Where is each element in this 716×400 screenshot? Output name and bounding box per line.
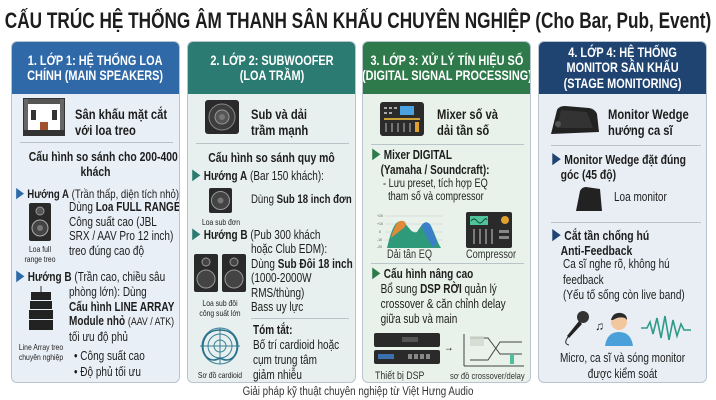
text: anti-feedback detail: (Yếu tố sống còn live band) [563,288,685,302]
text: wedge placement: góc (45 độ) [561,167,616,182]
text: advanced config [371,267,506,326]
footer: Giải pháp kỹ thuật chuyên nghiệp từ Việt Hưng Audio [243,386,473,398]
text: bullets: • Công suất cao [74,349,145,363]
text: sub caption: Sub và dải [251,106,307,122]
text: wedge placement: ▶ Monitor Wedge đặt đúng [551,152,686,167]
heading: layer 2 [188,42,355,94]
heading: layer 4: 4. LỚP 4: HỆ THỐNG [568,44,677,60]
chart: crossover diagram [464,334,524,366]
text: option B detail: Bass uy lực [251,300,303,314]
icon: microphone [565,311,589,346]
panel: layer 1 main speakers [11,41,180,383]
text: mixer detail: - Lưu preset, tích hợp EQ [383,178,488,190]
icon: digital mixer [380,102,424,136]
panel: layer 4 monitoring [538,41,707,383]
label: loa monitor: Loa monitor [614,190,667,204]
text: summary: Tóm tắt: [253,323,292,337]
text: wedge caption [608,106,689,138]
label: line array [19,342,63,362]
text: compare heading [29,149,178,178]
icon: singer [595,312,633,346]
text: advanced config: ▶ Cấu hình nâng cao [371,267,473,281]
label: DSP: Thiết bị DSP [375,370,424,382]
heading: layer 4: MONITOR SÂN KHẤU [566,59,679,75]
text: anti-feedback [551,228,649,258]
icon: double sub [194,254,246,292]
text: advanced config: crossover & căn chỉnh delay [381,297,506,311]
label: compressor: Compressor [466,249,516,261]
text: anti-feedback detail [563,257,685,302]
text: mixer caption: dải tần số [437,122,489,138]
text: option B detail: tối ưu độ phủ [69,330,128,344]
text: advanced config: Bổ sung DSP RỜI quản lý [381,282,497,296]
chart: EQ curve [377,214,443,248]
text: option A: ▶ Hướng A (Bar 150 khách): [191,169,324,183]
text: wedge caption: hướng ca sĩ [608,122,673,138]
text: anti-feedback: ▶ Cắt tần chống hú [551,228,649,243]
heading: layer 3: 3. LỚP 3: XỬ LÝ TÍN HIỆU SỐ [370,52,523,68]
label: crossover: sơ đồ crossover/delay [450,371,525,382]
text: compare heading: khách [80,164,111,178]
text: mixer detail: tham số và compressor [388,191,484,203]
text: option B detail: Dùng Sub Đôi 18 inch [251,256,353,270]
text: mixer digital: (Yamaha / Soundcraft): [381,162,490,176]
text: wedge caption: Monitor Wedge [608,106,689,122]
heading: layer 4 [539,42,706,94]
text: caption: Micro, ca sĩ và sóng monitor [560,351,685,365]
text: option A detail: Công suất cao (JBL [69,214,157,228]
text: bullets [74,349,145,378]
heading: layer 2: 2. LỚP 2: SUBWOOFER [210,52,333,68]
panel: layer 2 subwoofer [187,41,356,383]
text: mixer digital [371,148,490,176]
text: option B detail: Cấu hình LINE ARRAY [69,300,174,314]
chart: EQ curve: +20 [377,214,383,218]
icon: cardioid diagram [200,328,240,364]
arrow: → [444,340,454,354]
text: summary: cụm trung tâm [253,353,317,367]
icon: subwoofer [205,100,239,134]
text: option B detail: phòng lớn): Dùng [69,285,147,299]
heading: layer 1: CHÍNH (MAIN SPEAKERS) [28,67,163,83]
text: mixer caption: Mixer số và [437,106,498,122]
label: full range [24,244,56,264]
label: double sub [199,298,241,318]
text: option A: ▶ Hướng A (Trần thấp, diện tích nhỏ): [15,187,180,201]
icon: singer: ♫ [595,319,604,333]
text: sub caption: trầm mạnh [251,122,308,138]
text: option B: ▶ Hướng B (Pub 300 khách [191,228,320,242]
icon: DSP devices [374,333,440,364]
icon: full range speaker [29,203,51,241]
text: caption [556,351,689,382]
icon: stage [23,98,65,136]
text: bullets: • Độ phủ tối ưu [74,364,141,378]
heading: layer 3: (DIGITAL SIGNAL PROCESSING) [362,67,531,83]
text: anti-feedback detail: Ca sĩ nghe rõ, không hú [563,257,670,271]
text: summary [253,322,339,382]
chart: EQ curve: -10 [377,238,382,242]
label: line array: chuyên nghiệp [19,352,63,362]
text: option B detail: Module nhỏ (AAV / ATK) [69,314,174,328]
label: full range: Loa full [29,244,51,254]
text: stage caption [75,106,167,138]
text: summary: Bố trí cardioid hoặc [253,338,339,352]
text: option B detail: RMS/thùng) [251,286,304,300]
text: option B detail: hoặc Club EDM): [251,242,327,256]
heading: layer 1: 1. LỚP 1: HỆ THỐNG LOA [28,52,163,68]
text: wedge placement [551,152,686,182]
text: caption: được kiểm soát [588,366,657,380]
label: double sub: Loa sub đôi [202,298,238,308]
text: mixer detail [383,178,488,203]
text: option A detail: SRX / AAV Pro 12 inch) [69,229,173,243]
icon: monitor wedge [551,106,599,134]
label: line array: Line Array treo [19,342,63,352]
chart: EQ curve: 0 [379,230,381,234]
text: stage caption: Sân khấu mặt cắt [75,106,167,122]
text: mixer digital: ▶ Mixer DIGITAL [371,148,452,162]
text: mixer caption [437,106,498,138]
text: option B detail [251,242,353,314]
label: full range: range treo [24,254,56,264]
text: option A detail: Dùng Loa FULL RANGE [69,200,180,214]
label: single sub: Loa sub đơn [202,217,240,227]
icon: single sub [209,188,232,213]
title: CẤU TRÚC HỆ THỐNG ÂM THANH SÂN KHẤU CHUYÊN NGHIỆP (Cho Bar, Pub, Event) [5,8,711,33]
label: EQ: Dải tần EQ [387,249,432,261]
heading: layer 1 [12,42,179,94]
text: option A detail: treo đúng cao độ [69,244,144,258]
heading: layer 4: (STAGE MONITORING) [564,75,681,91]
text: stage caption: với loa treo [75,122,136,138]
heading: layer 3 [363,42,530,94]
text: option A detail [69,200,180,258]
icon: sound wave [641,314,691,342]
text: option B: ▶ Hướng B (Trần cao, chiều sâu [15,270,165,284]
text: compare heading: Cấu hình so sánh quy mô [208,150,335,165]
icon: small wedge [576,187,602,211]
panel: layer 3 DSP [362,41,531,383]
text: option A detail: Dùng Sub 18 inch đơn [251,192,352,206]
text: sub caption [251,106,308,138]
text: anti-feedback: Anti-Feedback [561,243,632,258]
label: double sub: công suất lớn [199,308,241,318]
chart: EQ curve: +10 [377,222,383,226]
text: advanced config: giữa sub và main [381,312,457,326]
text: option B detail [69,285,174,344]
text: summary: giảm nhiễu [253,368,302,382]
text: option B detail: (1000-2000W [251,271,312,285]
text: compare heading: Cấu hình so sánh cho 200-400 [29,149,178,164]
heading: layer 2: (LOA TRẦM) [239,67,304,83]
icon: compressor [466,212,512,248]
icon: line array [29,286,53,330]
text: anti-feedback detail: feedback [563,272,604,286]
label: cardioid: Sơ đồ cardioid [198,370,242,380]
